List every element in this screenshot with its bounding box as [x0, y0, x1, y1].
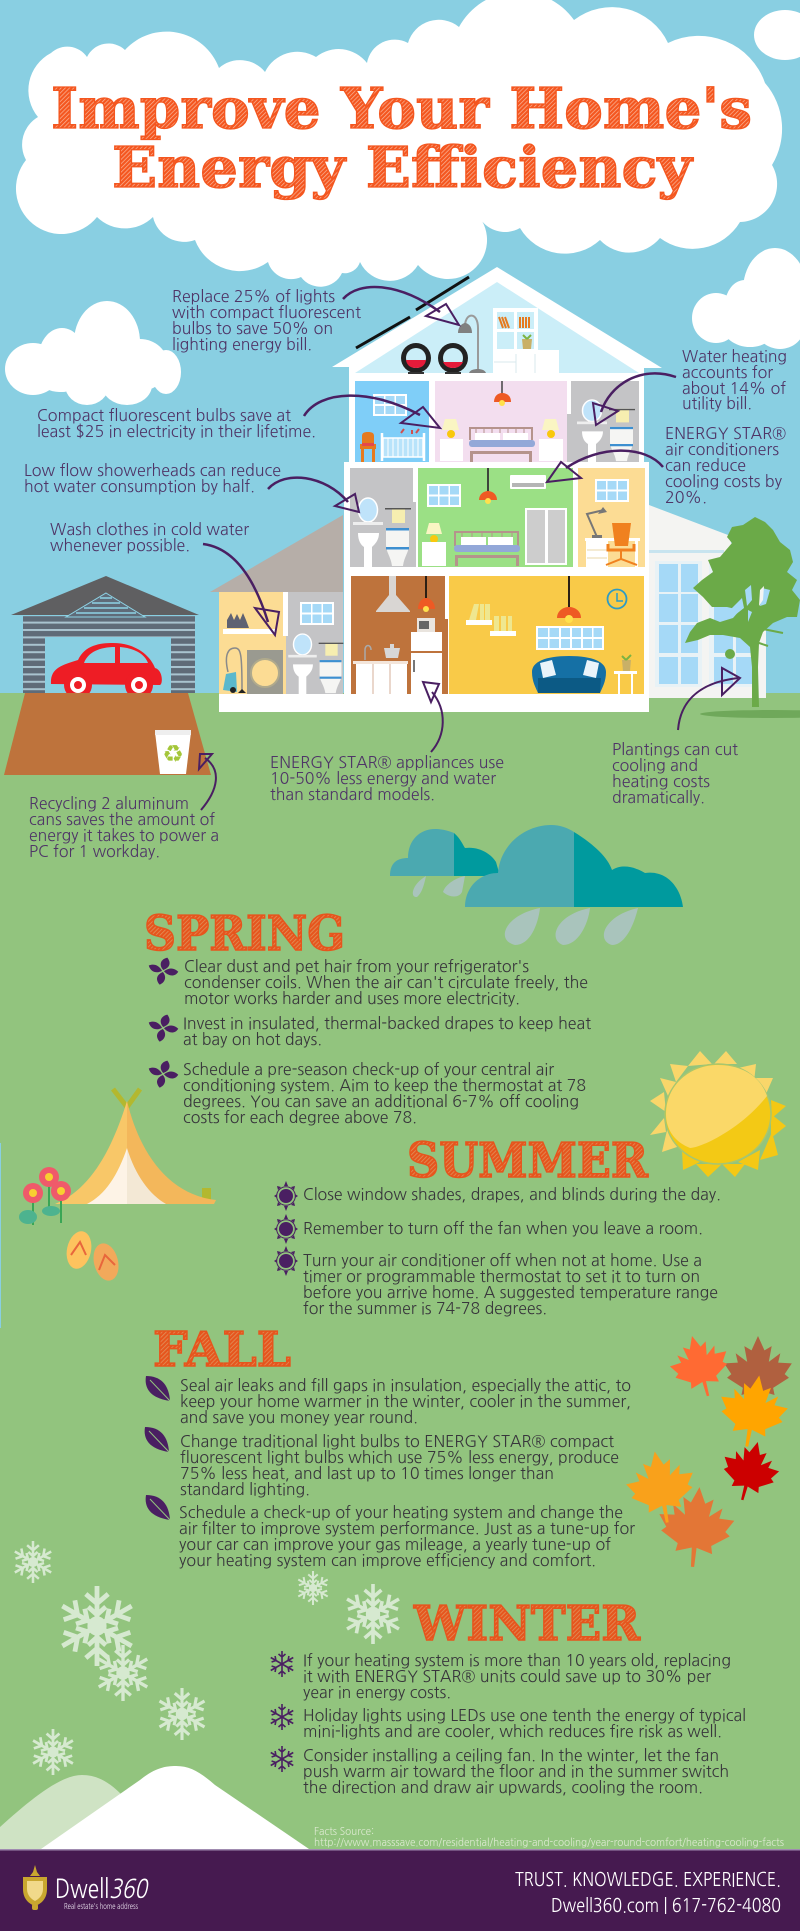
annotation: air conditioners: can reduce — [665, 458, 746, 474]
annotation: showerheads: hot water consumption by half. — [24, 479, 255, 495]
arrow: air conditioners tip — [547, 451, 663, 482]
annotation: replace lights: with compact fluorescent — [172, 305, 361, 321]
spring tips: costs for each degree above 78. — [183, 1110, 417, 1126]
annotation: replace lights: Replace 25% of lights — [172, 289, 335, 305]
black slash marks — [356, 277, 469, 348]
annotation: appliances: 10-50% less energy and water — [270, 771, 496, 787]
window right — [709, 561, 756, 687]
annotation: appliances: ENERGY STAR® appliances use — [270, 755, 504, 771]
arrow: cold water tip — [203, 544, 279, 635]
house — [219, 267, 662, 712]
icon: recycling cup: ♻ — [162, 740, 184, 768]
title cloud — [16, 0, 782, 287]
nursery — [355, 381, 429, 462]
arrow: showerheads tip — [268, 478, 359, 512]
icon: recycling cup — [155, 730, 191, 774]
spring tips: Schedule a pre-season check-up of your central air — [183, 1062, 554, 1078]
kitchen — [351, 576, 450, 694]
annotation: recycling: energy it takes to power a — [29, 828, 219, 844]
garage — [11, 576, 199, 699]
cloud right — [692, 248, 800, 349]
annotation: water heating: accounts for — [682, 365, 773, 381]
annotation: recycling: cans saves the amount of — [29, 812, 215, 828]
annotation: showerheads: Low flow showerheads can reduce — [24, 463, 281, 479]
logo tagline: Real estate's home address — [64, 1902, 138, 1911]
winter tips: If your heating system is more than 10 years old, replacing — [303, 1653, 731, 1669]
winter tips: Consider installing a ceiling fan. In the winter, let the fan — [303, 1748, 719, 1764]
icon: door knocker logo — [23, 1865, 47, 1910]
annotation: air conditioners: ENERGY STAR® — [665, 426, 786, 442]
annotation: CFL savings: least $25 in electricity in their lifetime. — [37, 423, 316, 440]
summer tips — [274, 1181, 721, 1317]
fall tips: fluorescent light bulbs which use 75% less energy, produce — [180, 1450, 619, 1466]
left extension of house — [210, 515, 343, 698]
annotation: plantings: cooling and — [612, 758, 698, 774]
green bedroom — [418, 468, 573, 567]
sun — [650, 1051, 786, 1177]
annotation: air conditioners: cooling costs by — [665, 474, 782, 490]
spring tips: conditioning system. Aim to keep the thermostat at 78 — [183, 1078, 586, 1094]
snowflakes — [12, 1541, 403, 1775]
annotation: appliances: than standard models. — [270, 787, 435, 803]
annotation: plantings — [612, 742, 738, 806]
annotation: cold water — [50, 522, 249, 554]
annotation: recycling — [29, 796, 219, 860]
fall tips: your car can improve your gas mileage, a yearly tune-up of — [179, 1537, 611, 1553]
annotation: showerheads — [24, 463, 281, 495]
annotation: cold water: Wash clothes in cold water — [50, 522, 249, 538]
fall tips: 75% less heat, and last up to 10 times longer than — [180, 1466, 554, 1482]
facts source: Facts Source: — [314, 1826, 374, 1837]
living room — [449, 576, 644, 694]
flowers — [19, 1167, 71, 1225]
cloud left — [5, 301, 181, 405]
study — [578, 468, 645, 567]
fall tips: Schedule a check-up of your heating system and change the — [179, 1505, 623, 1521]
annotation: water heating: about 14% of — [682, 381, 786, 397]
fall tips: keep your home warmer in the winter, cooler in the summer, — [180, 1394, 631, 1410]
spring tips: condenser coils. When the air can't circulate freely, the — [184, 975, 588, 991]
winter tips: mini-lights and are cooler, which reduces fire risk as well. — [303, 1724, 722, 1740]
annotation: replace lights: lighting energy bill. — [172, 337, 312, 353]
spring tips: Clear dust and pet hair from your refrigerator's — [184, 959, 529, 975]
footer — [0, 1849, 800, 1931]
arrow: bulbs tip — [304, 396, 440, 428]
bedroom pink — [435, 381, 572, 462]
summer tips: before you arrive home. A suggested temperature range — [303, 1285, 718, 1301]
annotation: cold water: whenever possible. — [50, 538, 190, 554]
spring tips: motor works harder and uses more electricity. — [184, 991, 520, 1007]
facts source — [314, 1826, 784, 1848]
autumn leaves — [621, 1329, 793, 1570]
snowy mountains — [0, 1766, 309, 1849]
summer tips: for the summer is 74-78 degrees. — [303, 1301, 547, 1317]
annotation: CFL savings — [37, 408, 316, 440]
title — [51, 76, 752, 201]
icon: red car — [51, 643, 162, 699]
annotation: replace lights: bulbs to save 50% on — [172, 321, 333, 337]
laundry room — [219, 592, 288, 694]
summer tips: Close window shades, drapes, and blinds during the day. — [303, 1187, 721, 1203]
annotation: water heating: utility bill. — [682, 396, 752, 412]
fall tips: Change traditional light bulbs to ENERGY STAR® compact — [180, 1434, 614, 1450]
grass background — [0, 693, 800, 1850]
tent — [55, 1089, 216, 1204]
sky background — [0, 0, 800, 700]
fall tips — [145, 1376, 635, 1569]
arrow: plantings tip — [678, 668, 740, 730]
winter tips: push warm air toward the floor and in the summer switch — [303, 1764, 729, 1780]
winter tips — [269, 1651, 746, 1796]
spring heading: SPRING — [144, 906, 345, 962]
winter heading: WINTER — [413, 1596, 641, 1652]
annotation: plantings: heating costs — [612, 774, 710, 790]
tree — [685, 517, 800, 718]
window left — [655, 561, 702, 687]
arrow: appliances tip — [423, 682, 443, 752]
right extension of house — [649, 505, 766, 698]
fall tips: and save you money year round. — [180, 1410, 418, 1426]
fall tips: standard lighting. — [180, 1482, 310, 1498]
annotation: water heating — [682, 349, 787, 412]
rain clouds — [390, 825, 683, 945]
cloud top right — [754, 10, 800, 60]
fall heading: FALL — [153, 1322, 291, 1378]
title: Improve Your Home's — [51, 76, 752, 142]
annotation: plantings: Plantings can cut — [612, 742, 738, 758]
summer heading: SUMMER — [407, 1133, 649, 1189]
annotation: recycling: Recycling 2 aluminum — [29, 796, 189, 812]
bathroom small — [283, 592, 343, 694]
winter tips: Holiday lights using LEDs use one tenth the energy of typical — [303, 1708, 746, 1724]
fall tips: your heating system can improve efficiency and comfort. — [179, 1553, 596, 1569]
logo wordmark: Dwell360 — [55, 1876, 149, 1902]
annotation: plantings: dramatically. — [612, 790, 705, 806]
annotation: CFL savings: Compact fluorescent bulbs save at — [37, 408, 291, 424]
annotation: air conditioners — [665, 426, 786, 506]
fall tips: air filter to improve system performance. Just as a tune-up for — [179, 1521, 635, 1537]
spring tips: Invest in insulated, thermal-backed drapes to keep heat — [183, 1016, 591, 1032]
annotation: recycling: PC for 1 workday. — [29, 844, 160, 860]
flip flops — [63, 1229, 122, 1283]
arrow: water heating tip — [593, 373, 676, 425]
annotation: air conditioners: air conditioners — [665, 442, 779, 458]
annotation: appliances — [270, 755, 504, 803]
spring tips — [148, 956, 591, 1126]
attic — [401, 308, 559, 374]
bathroom upstairs — [571, 381, 639, 462]
fall tips: Seal air leaks and fill gaps in insulation, especially the attic, to — [180, 1378, 631, 1394]
bathroom middle floor — [350, 468, 418, 567]
winter tips: it with ENERGY STAR® units could save up to 30% per — [303, 1669, 711, 1685]
annotation: replace lights — [172, 289, 361, 353]
summer tips: Turn your air conditioner off when not at home. Use a — [303, 1253, 702, 1269]
title: Energy Efficiency — [112, 135, 694, 201]
spring tips: degrees. You can save an additional 6-7% off cooling — [183, 1094, 579, 1110]
spring tips: at bay on hot days. — [183, 1032, 322, 1048]
driveway — [4, 693, 211, 775]
summer tips: timer or programmable thermostat to set it to turn on — [303, 1269, 700, 1285]
annotation: air conditioners: 20%. — [665, 490, 707, 506]
arrow: recycling tip — [199, 754, 216, 810]
winter tips: the direction and draw air upwards, cooling the room. — [303, 1780, 703, 1796]
annotation: water heating: Water heating — [682, 349, 787, 365]
summer tips: Remember to turn off the fan when you leave a room. — [303, 1221, 703, 1237]
winter tips: year in energy costs. — [303, 1685, 451, 1701]
arrow: lighting tip — [343, 287, 459, 325]
